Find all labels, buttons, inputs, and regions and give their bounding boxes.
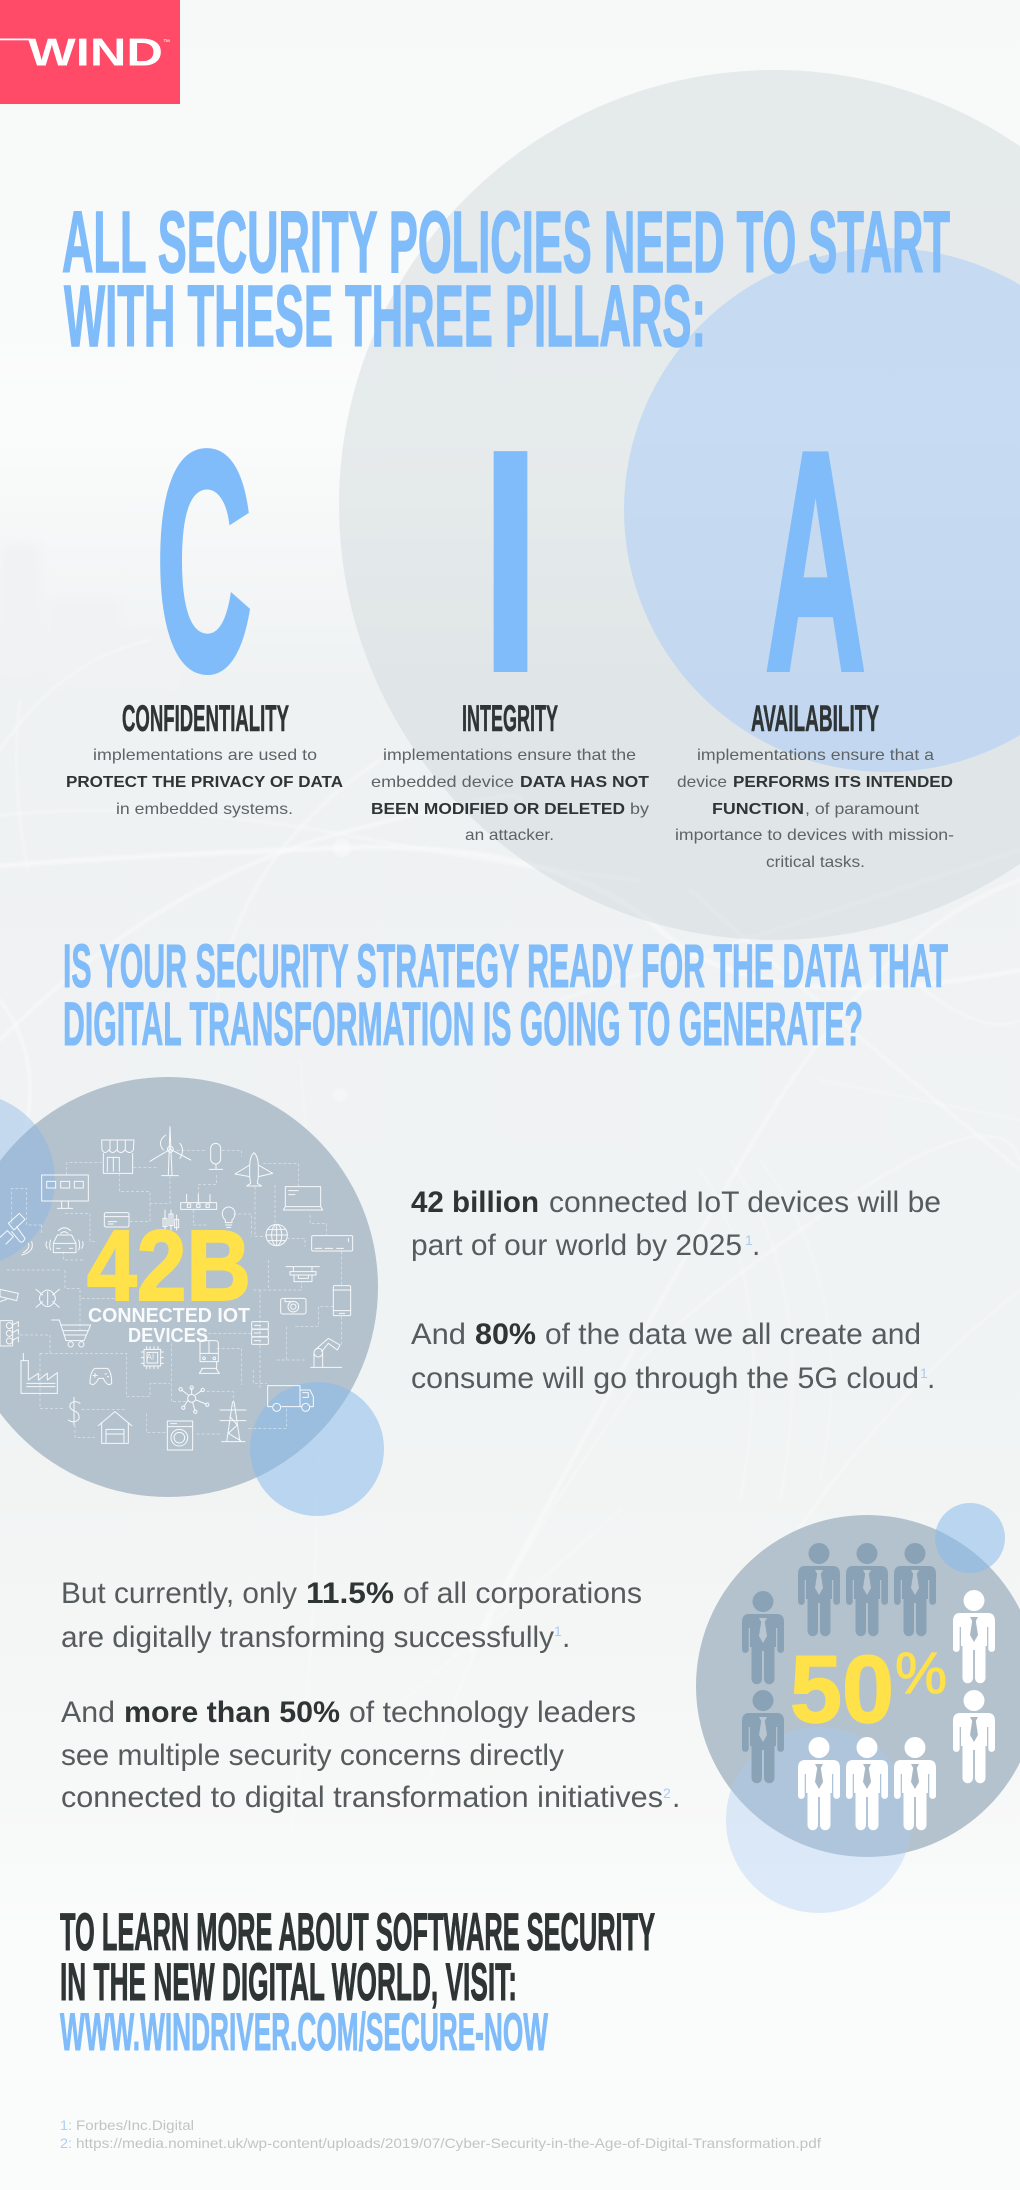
footnotes: 1:	[60, 2117, 72, 2133]
text block: digital transformation statistics: of all corporations	[403, 1577, 642, 1610]
icon: train	[199, 1341, 219, 1373]
pillar: availability: A	[765, 388, 866, 736]
description: availability: FUNCTION	[712, 801, 804, 818]
description: availability: implementations ensure that a	[697, 747, 934, 764]
label: connected IoT devices: CONNECTED IOT	[88, 1305, 250, 1327]
icon: drone left	[36, 1289, 59, 1307]
text block: digital transformation statistics	[61, 1577, 680, 1814]
footnotes: 2:	[60, 2135, 72, 2151]
label: connected IoT devices	[88, 1305, 250, 1347]
text block: 42 billion devices: of the data we all create and	[545, 1318, 921, 1351]
icon: phone	[333, 1286, 351, 1316]
people: white figures	[798, 1590, 995, 1830]
heading: availability: AVAILABILITY	[751, 698, 879, 739]
section heading: digital transformation	[63, 932, 948, 1058]
footnotes: Forbes/Inc.Digital	[76, 2117, 194, 2133]
description: confidentiality	[66, 747, 343, 818]
pillar: integrity	[371, 382, 649, 844]
decorative blue circle top right	[935, 1503, 1005, 1573]
icon: card	[104, 1213, 129, 1227]
icon: laptop	[283, 1187, 323, 1210]
call to action: IN THE NEW DIGITAL WORLD, VISIT:	[60, 1953, 517, 2012]
text block: digital transformation statistics: of technology leaders	[349, 1696, 636, 1729]
icon: globe	[266, 1224, 287, 1246]
description: integrity: embedded device	[371, 774, 514, 791]
decorative large grey circle	[339, 70, 1020, 940]
heading: confidentiality: CONFIDENTIALITY	[122, 698, 289, 739]
icon: truck	[268, 1386, 313, 1407]
text block: 42 billion devices: connected IoT devices will be	[549, 1186, 941, 1219]
description: integrity: implementations ensure that the	[383, 747, 636, 764]
icon: wind turbine	[150, 1127, 191, 1176]
text block: digital transformation statistics: And	[61, 1696, 115, 1729]
icon: traffic light	[0, 1321, 13, 1346]
circle background	[696, 1515, 1020, 1857]
logo: Wind River: WIND	[28, 32, 163, 74]
label: connected IoT devices: DEVICES	[128, 1325, 208, 1347]
icon: monitor	[42, 1175, 88, 1201]
footnotes: https://media.nominet.uk/wp-content/uploads/2019/07/Cyber-Security-in-the-Age-of-Digital-Transformation.pdf	[76, 2135, 821, 2151]
description: confidentiality: implementations are used to	[93, 747, 317, 764]
text block: digital transformation statistics: 1	[554, 1623, 562, 1639]
description: availability: importance to devices with mission-	[675, 827, 954, 844]
text block: digital transformation statistics: 2	[663, 1785, 671, 1801]
icon: hub	[188, 1394, 196, 1402]
description: availability: critical tasks.	[766, 854, 865, 871]
pillar: integrity: INTEGRITY	[462, 698, 558, 739]
icon: factory	[21, 1353, 57, 1393]
decorative large blue circle	[624, 248, 1020, 772]
icon: pylon	[220, 1402, 246, 1442]
text block: 42 billion devices: 1	[920, 1365, 928, 1381]
decorative blue circle left	[0, 1093, 55, 1267]
title	[62, 194, 950, 365]
description: availability	[675, 747, 954, 871]
description: confidentiality: PROTECT THE PRIVACY OF DATA	[66, 774, 343, 791]
big letter I: I	[478, 382, 543, 741]
graphic: 42B connected IoT devices	[0, 1077, 384, 1516]
icon: light bulb	[222, 1207, 235, 1227]
description: integrity: by	[630, 801, 649, 818]
decorative blue circle lower right	[250, 1382, 384, 1516]
stat: 50%	[790, 1636, 947, 1743]
stat: 42B: 42B	[87, 1210, 251, 1322]
icon: shopping cart	[52, 1320, 91, 1341]
text block: digital transformation statistics: .	[562, 1621, 570, 1654]
text block: 42 billion devices: And	[411, 1318, 466, 1351]
icon: drone right	[286, 1267, 319, 1282]
icon: camera	[281, 1298, 306, 1314]
text block: 42 billion devices: consume will go through the 5G cloud	[411, 1362, 919, 1395]
link: secure-now url: WWW.WINDRIVER.COM/SECURE-NOW	[60, 2003, 548, 2062]
icon: router	[181, 1203, 217, 1209]
description: integrity: BEEN MODIFIED OR DELETED	[371, 801, 625, 818]
description: confidentiality: in embedded systems.	[116, 801, 293, 818]
icon: server	[252, 1322, 268, 1329]
text block: digital transformation statistics: are digitally transforming successfully	[61, 1621, 554, 1654]
stat: 50%: 50	[790, 1636, 894, 1743]
text block: 42 billion devices: .	[927, 1362, 935, 1395]
decorative blue circle bottom left	[726, 1727, 912, 1913]
icon: store	[102, 1140, 134, 1173]
description: integrity	[371, 747, 649, 844]
stat: 50%: %	[895, 1641, 947, 1706]
text block: 42 billion devices	[411, 1186, 941, 1395]
text block: 42 billion devices: 1	[745, 1232, 753, 1248]
text block: digital transformation statistics: .	[672, 1781, 680, 1814]
icon: AI chip	[144, 1349, 161, 1366]
icon: satellite	[0, 1213, 32, 1255]
icon: washing machine	[167, 1421, 193, 1450]
description: integrity: DATA HAS NOT	[520, 774, 649, 791]
icon: candles	[163, 1210, 179, 1230]
text block: digital transformation statistics: connected to digital transformation initiatives	[61, 1781, 663, 1814]
text block: 42 billion devices: 42 billion	[411, 1186, 539, 1219]
graphic: 50% people	[696, 1503, 1020, 1913]
text block: 42 billion devices: part of our world by 2025	[411, 1229, 742, 1262]
icon: microphone	[211, 1143, 221, 1164]
text block: digital transformation statistics: more than 50%	[124, 1696, 340, 1729]
logo: Wind River	[0, 0, 180, 104]
logo: Wind River: ™	[163, 39, 170, 46]
icon: air conditioner	[312, 1236, 353, 1251]
pillar: confidentiality: C	[156, 388, 252, 736]
people: dark figures	[742, 1543, 936, 1783]
icon network	[0, 1127, 353, 1450]
icon network: AI	[147, 1352, 154, 1361]
icon: robot arm	[311, 1338, 342, 1367]
text block: digital transformation statistics: But currently, only	[61, 1577, 297, 1610]
icon: airplane	[235, 1153, 273, 1186]
description: availability: , of paramount	[805, 801, 920, 818]
icon: gamepad	[90, 1368, 112, 1385]
text block: digital transformation statistics: 11.5%	[306, 1577, 394, 1610]
call to action	[60, 1903, 655, 2062]
text block: digital transformation statistics: see multiple security concerns directly	[61, 1739, 564, 1772]
description: availability: PERFORMS ITS INTENDED	[733, 774, 953, 791]
circle background	[0, 1077, 378, 1497]
text block: 42 billion devices: 80%	[475, 1318, 536, 1351]
description: availability: device	[677, 774, 727, 791]
icon: dollar	[68, 1397, 80, 1425]
icon: house	[98, 1412, 132, 1443]
text block: 42 billion devices: .	[752, 1229, 760, 1262]
icon: security camera	[0, 1289, 18, 1302]
pillar: confidentiality	[66, 388, 343, 818]
description: integrity: an attacker.	[465, 827, 554, 844]
footnotes	[60, 2117, 821, 2151]
icon: connected car	[46, 1228, 83, 1253]
pillar: availability	[675, 388, 954, 871]
